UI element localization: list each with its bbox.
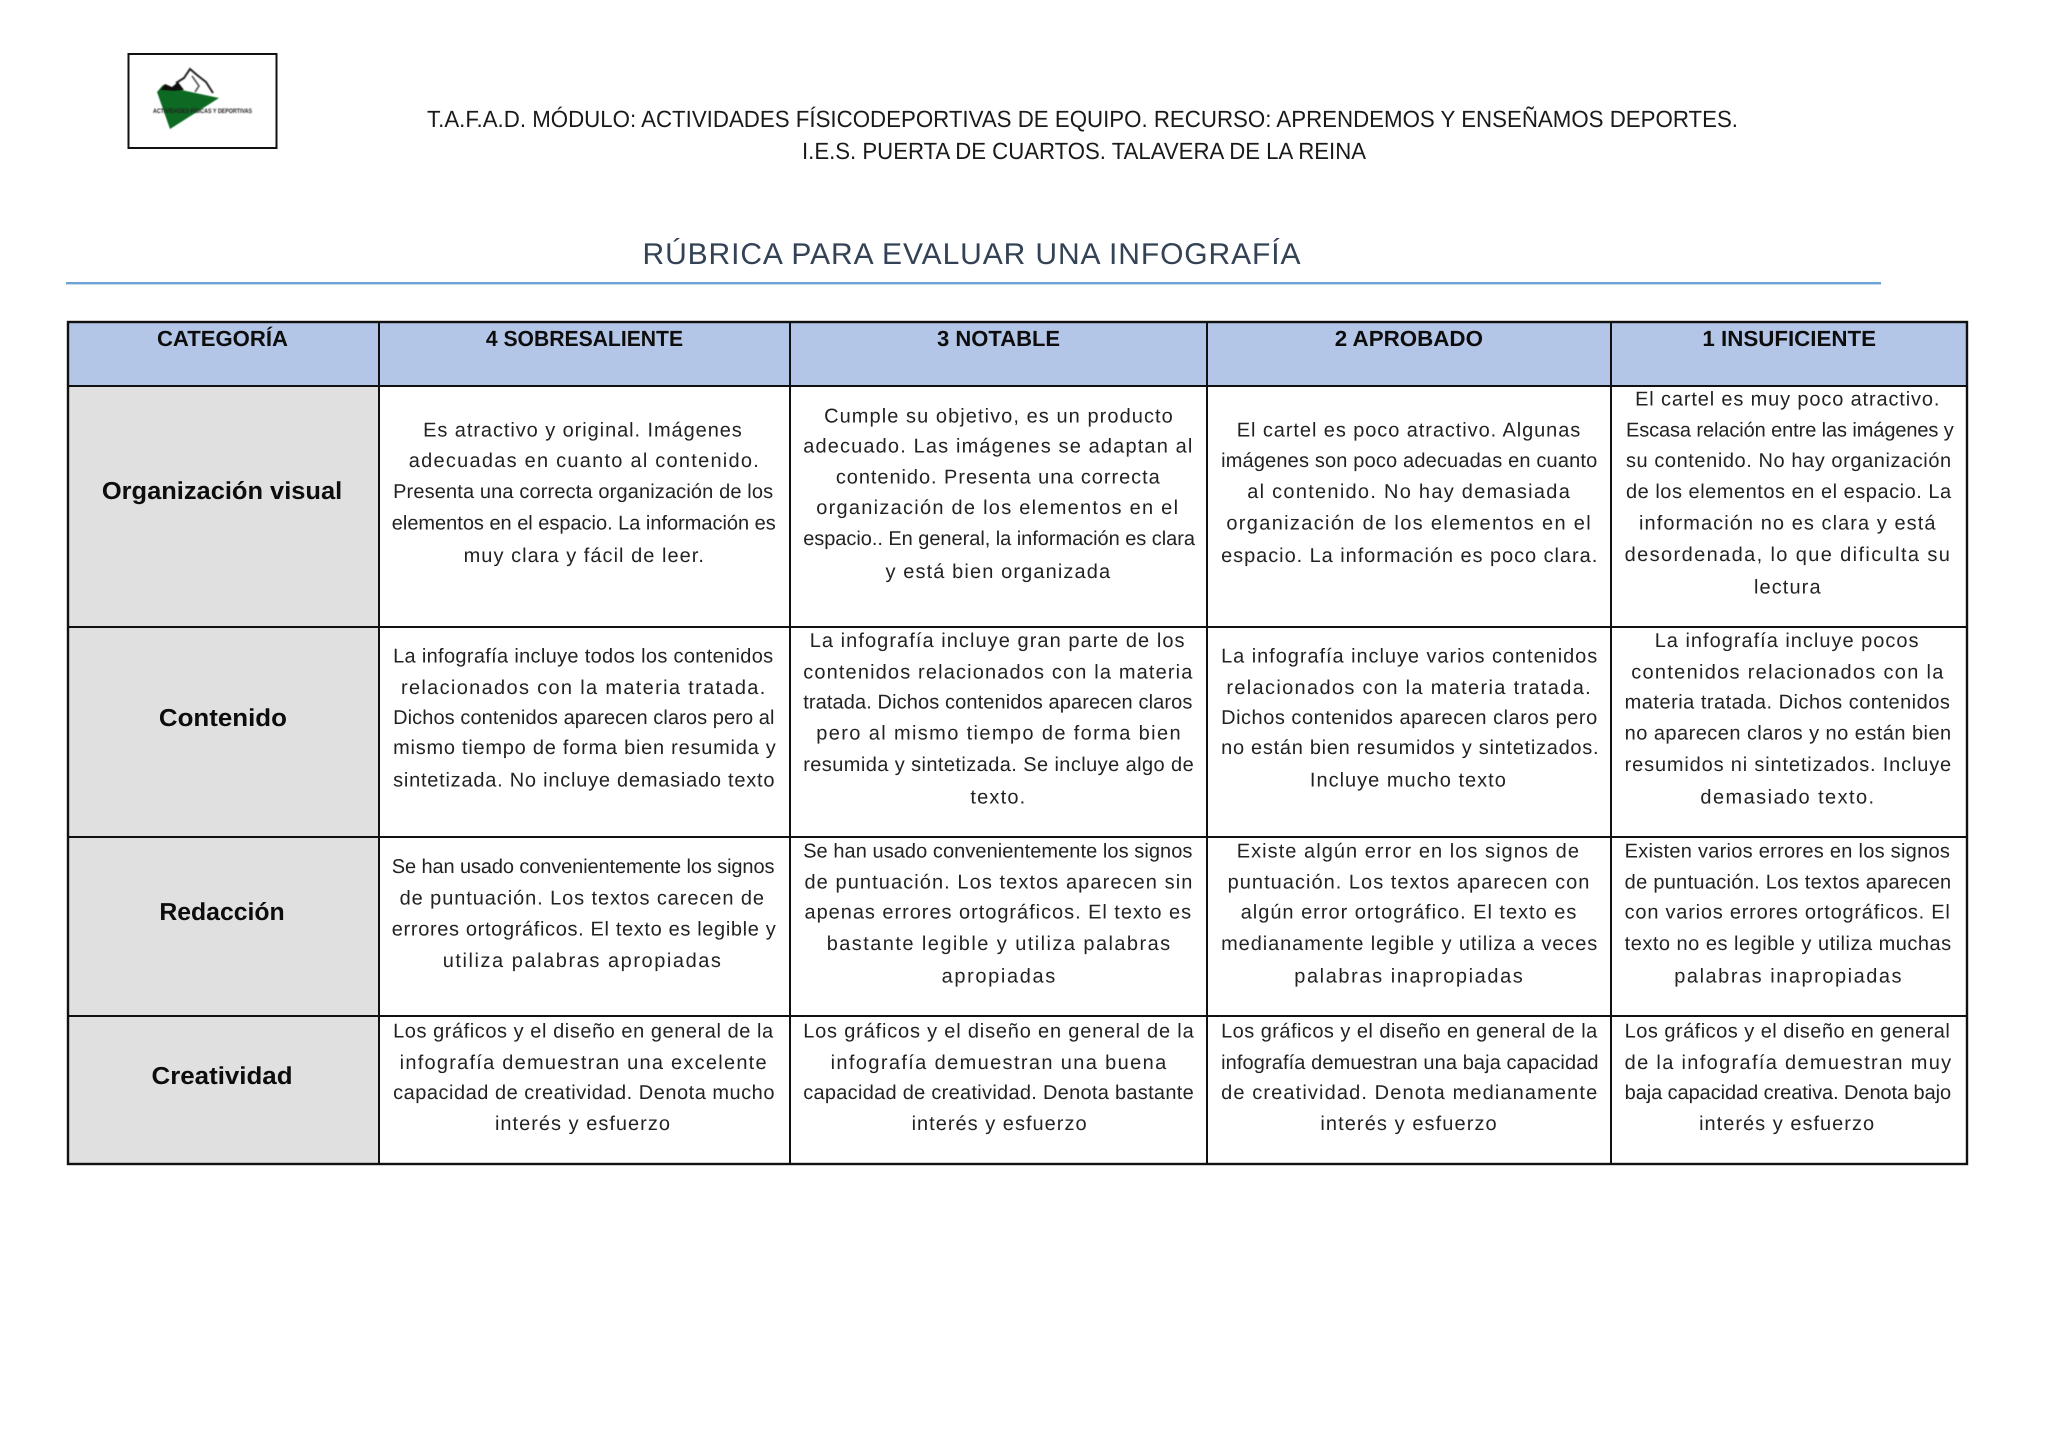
table grid <box>68 322 1967 1164</box>
cell: creatividad 1: de la infografía demuestran muy <box>1625 1052 1952 1074</box>
cell: visual 4: muy clara y fácil de leer. <box>464 545 704 567</box>
cell: visual 2: organización de los elementos en el <box>1226 512 1591 535</box>
cell: contenido 2: Incluye mucho texto <box>1310 770 1506 792</box>
title: RÚBRICA PARA EVALUAR UNA INFOGRAFÍA <box>642 237 1300 271</box>
cell: redaccion 1: Existen varios errores en los signos <box>1625 840 1950 862</box>
cell: creatividad 1 <box>1625 1021 1952 1135</box>
cell: visual 3: Cumple su objetivo, es un producto <box>824 405 1173 428</box>
cell: visual 4: adecuadas en cuanto al contenido. <box>409 450 759 472</box>
cell: contenido 2: La infografía incluye varios contenidos <box>1221 646 1598 668</box>
cell: redaccion 2 <box>1221 840 1598 988</box>
cell: visual 2: al contenido. No hay demasiada <box>1247 481 1570 503</box>
rubric table <box>68 322 1967 1164</box>
cell: visual 1: Escasa relación entre las imágenes y <box>1626 420 1954 442</box>
cell: creatividad 2: Los gráficos y el diseño en general de la <box>1221 1021 1598 1043</box>
cell: visual 3: contenido. Presenta una correcta <box>836 467 1160 489</box>
cell: visual 1: lectura <box>1754 576 1821 599</box>
cell: redaccion 1: palabras inapropiadas <box>1674 966 1902 988</box>
cell: redaccion 4 <box>392 856 776 972</box>
cell: contenido 1: demasiado texto. <box>1700 787 1874 809</box>
cell: redaccion 3: de puntuación. Los textos aparecen sin <box>804 872 1192 894</box>
cell: contenido 1: materia tratada. Dichos contenidos <box>1625 691 1950 714</box>
cell: redaccion 3: bastante legible y utiliza palabras <box>827 933 1171 955</box>
cell: contenido 1: no aparecen claros y no están bien <box>1625 723 1951 745</box>
cell: creatividad 2 <box>1221 1021 1599 1135</box>
cell: visual 4 <box>392 420 776 567</box>
category labels <box>102 477 342 1089</box>
cell: contenido 3: contenidos relacionados con la materia <box>803 661 1193 684</box>
category labels: Contenido <box>159 704 287 731</box>
cell: contenido 2: Dichos contenidos aparecen claros pero <box>1221 707 1597 729</box>
cell: visual 4: Es atractivo y original. Imágenes <box>423 420 742 442</box>
cell: redaccion 3: apenas errores ortográficos. El texto es <box>804 902 1192 924</box>
cell: creatividad 3: capacidad de creatividad. Denota bastante <box>803 1082 1194 1104</box>
cell: redaccion 3: apropiadas <box>942 966 1056 988</box>
cell: contenido 4: Dichos contenidos aparecen claros pero al <box>393 707 774 729</box>
cell: contenido 2: no están bien resumidos y sintetizados. <box>1221 737 1599 759</box>
cell: visual 3: adecuado. Las imágenes se adaptan al <box>803 435 1192 458</box>
cell: creatividad 1: baja capacidad creativa. Denota bajo <box>1625 1082 1951 1104</box>
header row: 1 INSUFICIENTE <box>1702 326 1876 351</box>
cell: creatividad 2: interés y esfuerzo <box>1320 1113 1497 1135</box>
cell: redaccion 1: texto no es legible y utiliza muchas <box>1625 933 1952 955</box>
cell: creatividad 4 <box>393 1021 774 1135</box>
cell: contenido 1: resumidos ni sintetizados. Incluye <box>1625 754 1951 776</box>
header text: T.A.F.A.D. MÓDULO: ACTIVIDADES FÍSICODEPORTIVAS DE EQUIPO. RECURSO: APRENDEMOS Y ENSEÑAMOS DEPORTES. <box>427 106 1738 132</box>
cell: redaccion 1: con varios errores ortográficos. El <box>1625 902 1950 924</box>
cell: creatividad 4: capacidad de creatividad. Denota mucho <box>393 1082 774 1104</box>
title underline <box>66 282 1881 284</box>
cell: visual 2 <box>1221 420 1597 567</box>
header text <box>427 106 1738 164</box>
cell: redaccion 2: algún error ortográfico. El texto es <box>1241 902 1577 924</box>
cell: visual 4: Presenta una correcta organización de los <box>393 481 774 503</box>
header row: 3 NOTABLE <box>937 326 1060 351</box>
cell: visual 3: y está bien organizada <box>885 561 1111 583</box>
cell: contenido 4: mismo tiempo de forma bien resumida y <box>393 737 776 759</box>
cell: creatividad 3: Los gráficos y el diseño en general de la <box>803 1021 1194 1043</box>
icon: mountain <box>157 69 219 129</box>
cell: creatividad 2: infografía demuestran una baja capacidad <box>1221 1052 1599 1074</box>
row: Creatividad <box>393 1021 1952 1135</box>
cell: visual 3: espacio.. En general, la información es clara <box>803 528 1196 550</box>
cell: creatividad 3: interés y esfuerzo <box>912 1113 1087 1135</box>
cell: contenido 2 <box>1221 646 1599 792</box>
cell: creatividad 4: interés y esfuerzo <box>495 1113 670 1135</box>
cell: redaccion 3: Se han usado convenientemente los signos <box>803 840 1193 862</box>
cell: redaccion 4: de puntuación. Los textos carecen de <box>400 887 764 909</box>
cell: contenido 3 <box>803 630 1194 809</box>
cell: redaccion 4: utiliza palabras apropiadas <box>443 950 721 972</box>
cell: visual 2: El cartel es poco atractivo. Algunas <box>1237 420 1581 442</box>
cell: visual 1: de los elementos en el espacio. La <box>1626 481 1952 503</box>
cell: redaccion 4: errores ortográficos. El texto es legible y <box>392 919 776 941</box>
header row: 2 APROBADO <box>1335 326 1483 351</box>
cell: contenido 3: tratada. Dichos contenidos aparecen claros <box>803 691 1193 714</box>
cell: visual 2: espacio. La información es poco clara. <box>1221 545 1597 567</box>
category labels: Organización visual <box>102 477 342 504</box>
row: Redacción <box>392 840 1952 988</box>
cell: redaccion 1 <box>1625 840 1952 988</box>
cell: visual 3: organización de los elementos en el <box>816 497 1178 519</box>
cell: creatividad 1: Los gráficos y el diseño en general <box>1625 1021 1950 1043</box>
cell: visual 1: El cartel es muy poco atractivo. <box>1635 388 1939 411</box>
cell: contenido 3: resumida y sintetizada. Se incluye algo de <box>803 754 1194 776</box>
cell: visual 1: su contenido. No hay organización <box>1626 450 1951 472</box>
cell: contenido 3: La infografía incluye gran parte de los <box>810 630 1185 652</box>
cell: contenido 2: relacionados con la materia tratada. <box>1226 677 1591 699</box>
cell: contenido 1: La infografía incluye pocos <box>1655 630 1919 652</box>
cell: redaccion 3 <box>803 840 1193 988</box>
cell: visual 1: información no es clara y está <box>1639 512 1936 535</box>
cell: creatividad 4: infografía demuestran una excelente <box>400 1052 767 1074</box>
cell: creatividad 4: Los gráficos y el diseño en general de la <box>393 1021 774 1043</box>
row: Organización visual <box>392 388 1954 599</box>
cell: contenido 4: relacionados con la materia tratada. <box>401 677 765 699</box>
cell: redaccion 2: Existe algún error en los signos de <box>1237 840 1579 862</box>
cell: redaccion 1: de puntuación. Los textos aparecen <box>1625 872 1951 894</box>
header row: 4 SOBRESALIENTE <box>486 326 683 351</box>
cell: creatividad 1: interés y esfuerzo <box>1699 1113 1874 1135</box>
cell: contenido 4: sintetizada. No incluye demasiado texto <box>393 770 774 792</box>
cell: redaccion 2: medianamente legible y utiliza a veces <box>1221 933 1598 955</box>
cell: visual 1: desordenada, lo que dificulta su <box>1625 544 1950 566</box>
cell: contenido 3: texto. <box>970 787 1025 809</box>
cell: redaccion 4: Se han usado convenientemente los signos <box>392 856 775 878</box>
cell: contenido 3: pero al mismo tiempo de forma bien <box>816 723 1181 745</box>
cell: visual 2: imágenes son poco adecuadas en cuanto <box>1221 450 1597 472</box>
row: Contenido <box>393 630 1951 809</box>
cell: contenido 1 <box>1625 630 1951 809</box>
cell: creatividad 3: infografía demuestran una buena <box>831 1052 1167 1074</box>
cell: creatividad 2: de creatividad. Denota medianamente <box>1221 1082 1597 1104</box>
header text: I.E.S. PUERTA DE CUARTOS. TALAVERA DE LA REINA <box>802 138 1366 164</box>
header row <box>157 326 1876 351</box>
logo <box>128 54 276 148</box>
cell: contenido 1: contenidos relacionados con la <box>1631 661 1944 684</box>
cell: contenido 4: La infografía incluye todos los contenidos <box>393 646 774 668</box>
category labels: Redacción <box>159 898 285 925</box>
cell: contenido 4 <box>393 646 776 792</box>
cell: redaccion 2: puntuación. Los textos aparecen con <box>1228 872 1589 894</box>
cell: visual 4: elementos en el espacio. La información es <box>392 512 776 535</box>
cell: redaccion 2: palabras inapropiadas <box>1294 966 1523 988</box>
logo caption: ACTIVIDADES FÍSICAS Y DEPORTIVAS <box>153 107 253 115</box>
category labels: Creatividad <box>151 1062 293 1089</box>
cell: visual 3 <box>803 405 1196 583</box>
cell: visual 1 <box>1625 388 1954 599</box>
header row: CATEGORÍA <box>157 326 288 351</box>
cell: creatividad 3 <box>803 1021 1194 1135</box>
